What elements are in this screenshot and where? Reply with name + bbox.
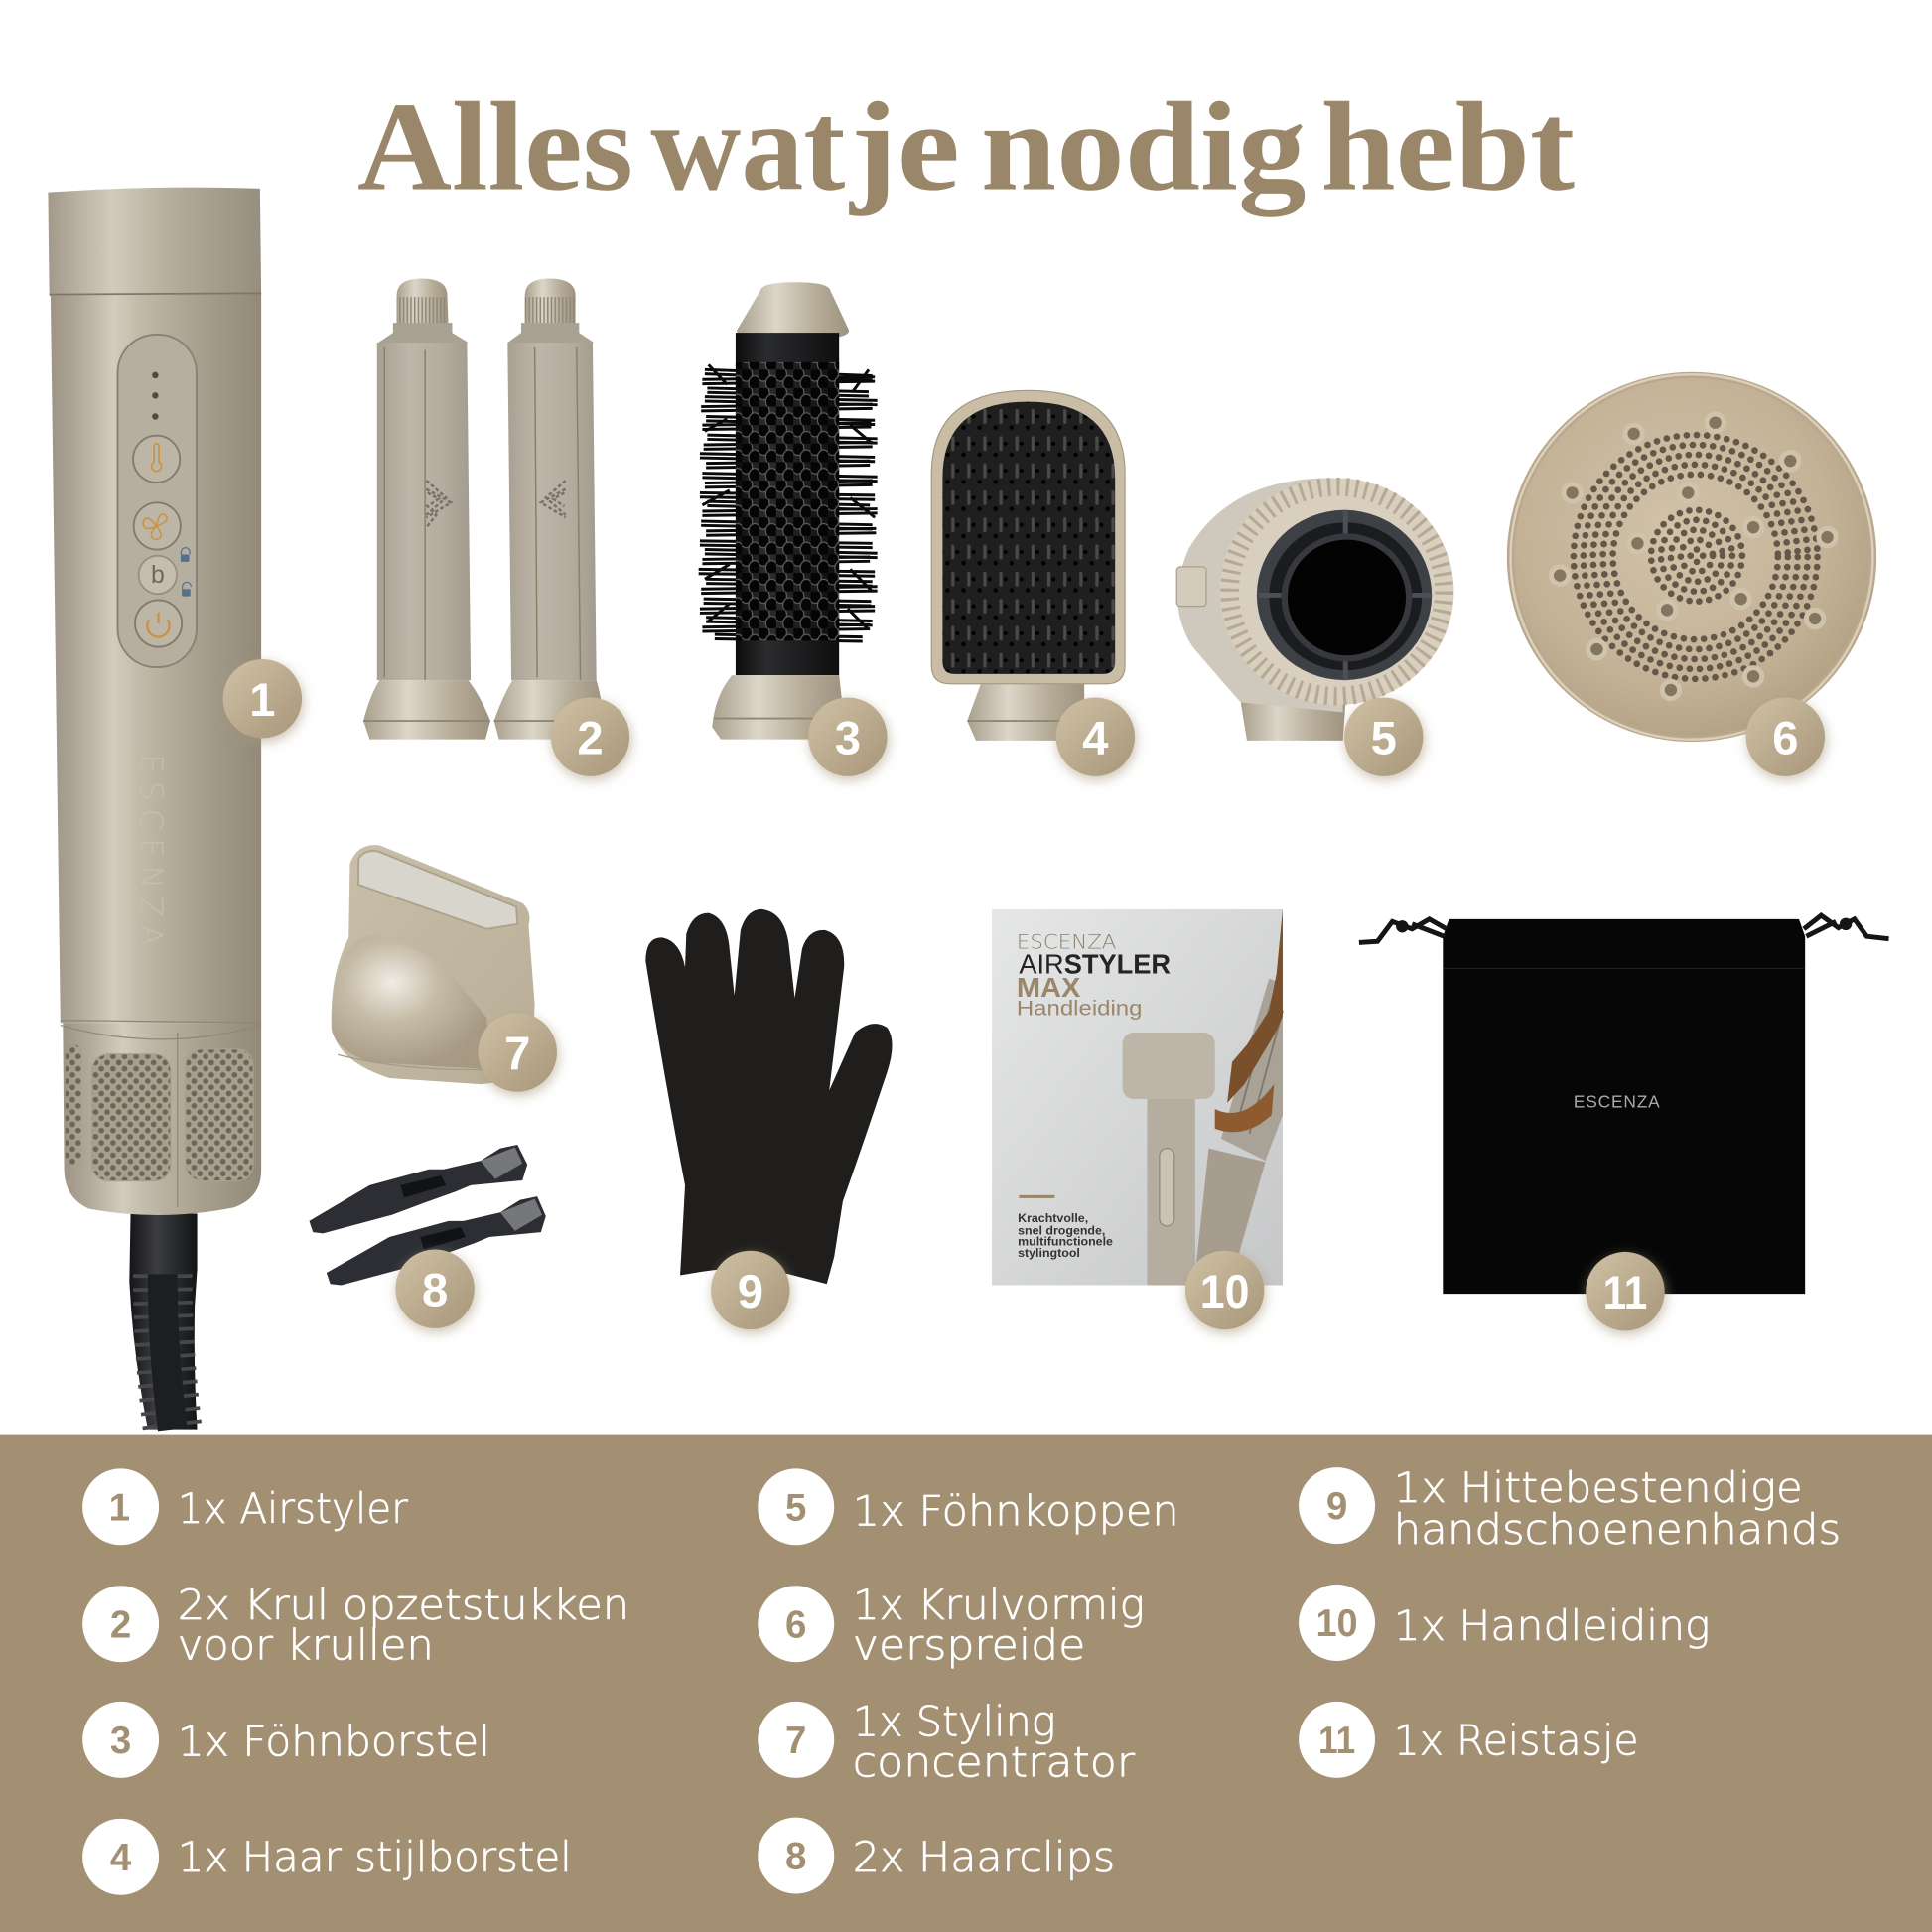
manual: cover text: Handleiding [1017,998,1142,1021]
badge 1 [223,659,302,738]
panel: contents list [0,1435,1932,1932]
badge 8 [395,1249,475,1328]
item 2 [82,1581,629,1670]
title: nodig [981,76,1307,217]
control panel: b [151,562,165,589]
item 6: 1x Krulvormig [853,1581,1145,1629]
badge 10: 10 [1200,1265,1249,1317]
badge 4 [1056,697,1135,776]
title [357,76,1575,217]
item 5 [758,1468,1179,1545]
product 11: travel pouch [1359,915,1889,1294]
badge 1: 1 [249,673,275,726]
vents [66,1044,254,1181]
item 9: 9 [1326,1485,1347,1528]
lower body [63,1023,261,1215]
item 6: verspreide [853,1621,1085,1670]
item 1 [82,1468,408,1545]
item 9: handschoenenhands [1394,1505,1841,1554]
cord [129,1213,198,1430]
item 9: 1x Hittebestendige [1394,1463,1803,1512]
product 1: airstyler [48,188,261,1430]
item 3: 1x Föhnborstel [178,1718,490,1766]
manual: cover text: Krachtvolle, [1018,1211,1088,1225]
badge 5: 5 [1371,712,1397,764]
brand on handle: ESCENZA [132,755,168,946]
item 8: 8 [785,1836,806,1878]
item 6 [758,1581,1145,1670]
title: je [848,76,960,217]
item 8: 2x Haarclips [853,1833,1115,1881]
product 6: diffuser [1507,372,1876,742]
product 3: round brush [699,282,878,740]
manual: cover text: snel drogende, [1018,1224,1105,1238]
product 8: hair clips [310,1145,546,1285]
bristles [699,364,878,641]
badge 3: 3 [835,712,861,764]
top cap [48,188,261,296]
item 5: 1x Föhnkoppen [853,1486,1179,1535]
clip two [327,1196,546,1285]
title: Alles [357,76,633,217]
badge 6: 6 [1772,712,1798,764]
manual: cover photo [1123,909,1283,1285]
number badges on products [223,659,1825,1330]
badge 7: 7 [504,1027,530,1079]
badge 11 [1586,1252,1665,1330]
product 4: straightening brush [931,390,1125,741]
badge 9 [711,1251,790,1329]
item 2: voor krullen [178,1621,434,1670]
product 2: curl attachments [363,278,604,740]
badge 6 [1746,697,1825,776]
badge 8: 8 [422,1264,448,1316]
product 11: travel pouch: ESCENZA [1574,1092,1660,1112]
badge 11: 11 [1603,1266,1647,1318]
control panel [118,335,197,667]
product 7: styling concentrator [332,845,535,1084]
manual: cover text: stylingtool [1018,1246,1080,1260]
manual: cover text: ESCENZA [1017,931,1116,954]
item 2: 2 [110,1603,131,1646]
item 7 [758,1698,1136,1787]
item 4 [82,1819,572,1895]
badge 4: 4 [1082,712,1108,764]
item 10 [1299,1585,1711,1661]
curler left [363,278,490,740]
badge 10 [1185,1251,1264,1329]
item 4: 1x Haar stijlborstel [178,1833,572,1881]
curler right [494,278,604,740]
manual: cover text: multifunctionele [1018,1235,1113,1249]
item 10: 10 [1315,1602,1358,1645]
badge 3 [808,697,888,776]
manual: cover text: MAX [1017,972,1080,1003]
title: wat [650,76,845,217]
item 5: 5 [785,1486,806,1529]
item 4: 4 [110,1837,132,1879]
item 7: 1x Styling [853,1698,1056,1746]
item 10: 1x Handleiding [1394,1601,1711,1650]
item 7: 7 [785,1720,806,1762]
manual: cover text [1017,931,1171,1260]
badge 5 [1344,697,1423,776]
item 6: 6 [785,1603,806,1646]
pins [1552,414,1836,699]
perforated rings [1574,435,1818,679]
item 7: concentrator [853,1738,1136,1787]
item 9 [1299,1463,1841,1554]
badge 2: 2 [577,712,604,764]
item 11: 11 [1318,1720,1355,1762]
item 2: 2x Krul opzetstukken [178,1581,629,1629]
badge 9: 9 [738,1265,763,1317]
upper body [51,293,261,1023]
item 11 [1299,1702,1639,1778]
drawstrings [1359,915,1889,942]
badge 2 [551,697,629,776]
clip one [310,1145,527,1233]
item 8 [758,1818,1115,1894]
item 3: 3 [110,1720,131,1762]
product 5: dryer head [1176,478,1453,741]
badge 7 [479,1013,557,1092]
item 1: 1x Airstyler [178,1484,408,1533]
item 1: 1 [109,1486,130,1529]
product 9: heat-resistant glove [645,909,893,1284]
item 11: 1x Reistasje [1394,1716,1639,1764]
product 10: manual [992,909,1283,1285]
manual: cover text: AIRSTYLER [1019,948,1171,979]
item 3 [82,1702,490,1778]
title: hebt [1320,76,1575,217]
